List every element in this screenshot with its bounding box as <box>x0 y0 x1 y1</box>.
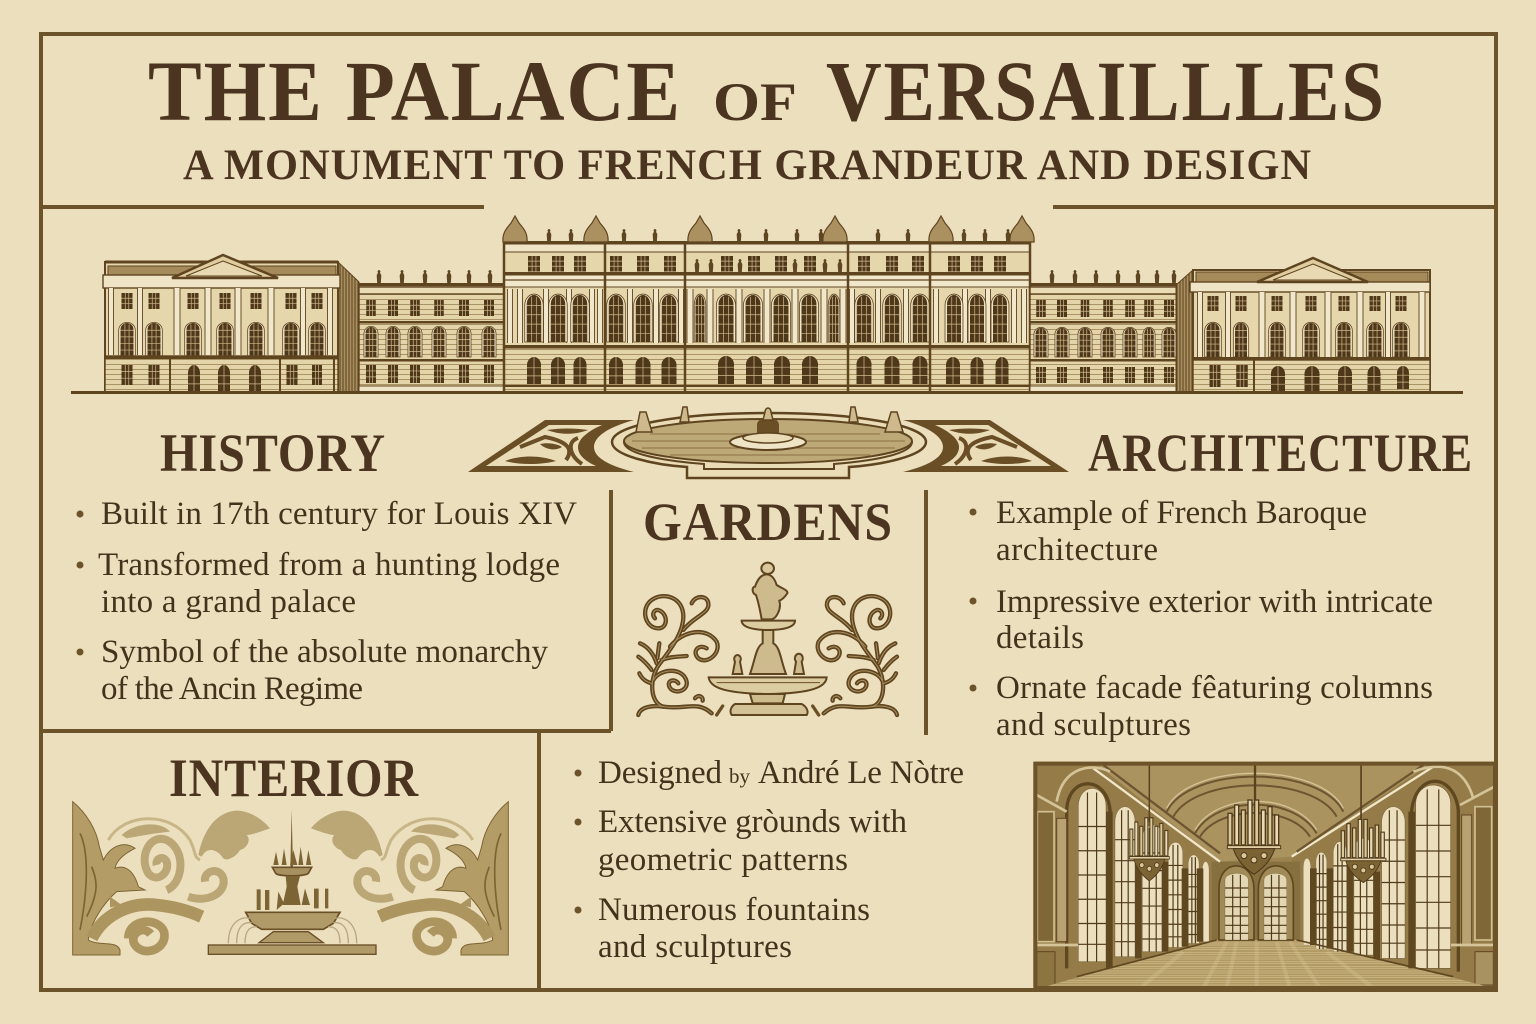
picture border <box>1035 764 1495 988</box>
basin finials <box>636 407 903 432</box>
panel: gardens bullets <box>574 755 964 965</box>
panel: gardens bullets: by <box>729 764 750 788</box>
left pavilion <box>103 255 359 392</box>
heading: architecture: ARCHITECTURE <box>1088 423 1473 483</box>
heading: gardens: GARDENS <box>643 492 893 552</box>
panel: history <box>76 423 577 707</box>
architecture bullets: details <box>996 620 1084 656</box>
panel: gardens bullets: geometric patterns <box>598 842 848 878</box>
hall left windows <box>1078 788 1209 962</box>
left parterre <box>468 420 634 472</box>
central block <box>503 216 1034 392</box>
right parterre <box>903 420 1069 472</box>
panel: gardens bullets: Designed <box>598 755 722 791</box>
history bullets: Symbol of the absolute monarchy <box>101 634 548 670</box>
chandelier right <box>1341 763 1386 883</box>
palace illustration <box>71 216 1463 394</box>
architecture bullets: Impressive exterior with intricate <box>996 584 1433 620</box>
title: OF <box>713 72 797 132</box>
garden parterre and basin <box>468 407 1069 478</box>
title: VERSAILLLES <box>826 43 1386 139</box>
hall walls and ceiling <box>1033 762 1500 990</box>
left wing <box>359 270 504 392</box>
architecture bullets: Ornate facade fêaturing columns <box>996 670 1433 706</box>
panel: gardens bullets: Numerous fountains <box>598 892 870 928</box>
panel: gardens bullets: André Le Nòtre <box>758 755 964 791</box>
chandelier left <box>1129 762 1169 881</box>
title <box>148 43 1386 139</box>
right pavilion <box>1176 258 1430 392</box>
history bullets: Built in 17th century for Louis XIV <box>101 496 577 532</box>
history bullets: into a grand palace <box>101 584 356 620</box>
architecture bullets: Example of French Baroque <box>996 495 1367 531</box>
hall right windows <box>1303 785 1451 968</box>
panel: architecture <box>970 423 1473 743</box>
hall pillars and picture lines <box>1109 812 1412 968</box>
architecture bullets: and sculptures <box>996 707 1191 743</box>
basin fountain <box>730 414 806 450</box>
chandelier centre <box>1227 762 1281 874</box>
panel: gardens bullets: and sculptures <box>598 929 792 965</box>
basin rim <box>612 413 926 478</box>
panel: gardens heading and fountain <box>638 492 897 715</box>
icon: garden fountain with scrolls <box>638 563 897 715</box>
architecture bullets: architecture <box>996 532 1158 568</box>
architecture bullets <box>970 495 1433 743</box>
heading: interior: INTERIOR <box>169 748 419 808</box>
history bullets: of the Ancin Regime <box>101 671 363 707</box>
panel: interior <box>73 748 508 955</box>
subtitle: A MONUMENT TO FRENCH GRANDEUR AND DESIGN <box>183 142 1312 189</box>
title: THE PALACE <box>148 43 682 139</box>
history bullets: Transformed from a hunting lodge <box>98 547 560 583</box>
hall floor <box>1048 940 1484 986</box>
ground line <box>71 391 1463 394</box>
basin water <box>624 419 912 469</box>
hall back windows <box>1219 866 1293 940</box>
heading: history: HISTORY <box>160 423 386 483</box>
history bullets <box>76 496 577 707</box>
panel: gardens bullets: Extensive gròunds with <box>598 804 908 840</box>
right wing <box>1030 270 1177 392</box>
hall of mirrors picture <box>1033 762 1500 990</box>
ornament with fountain <box>73 802 508 955</box>
